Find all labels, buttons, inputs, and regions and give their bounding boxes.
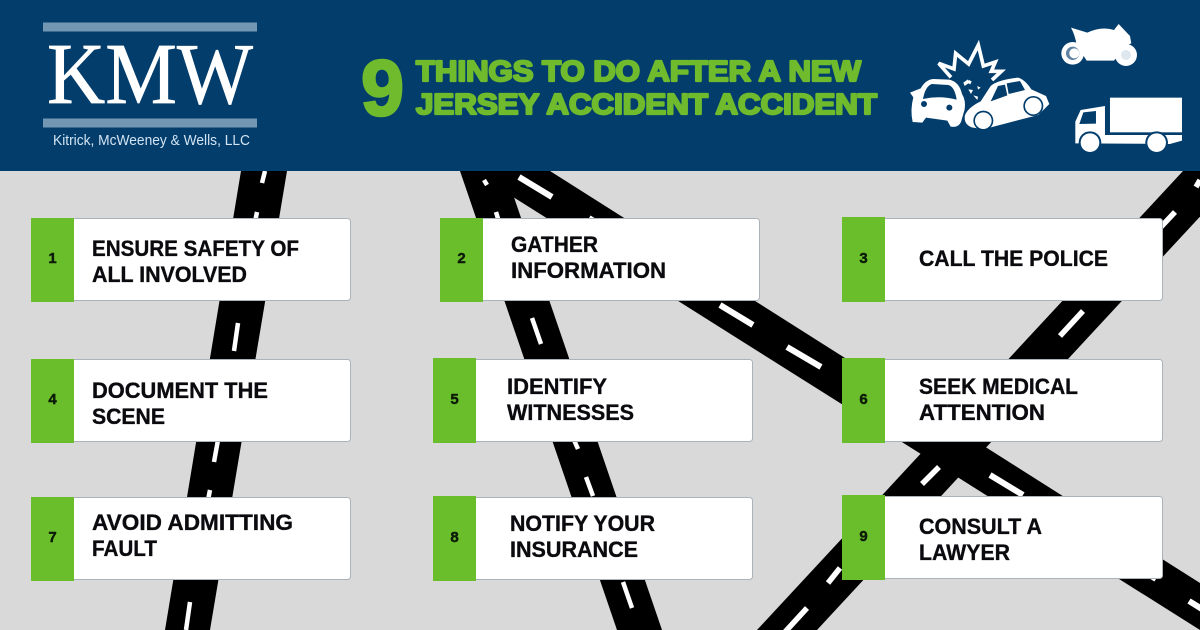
text 7: AVOID ADMITTING [92,510,293,535]
card 7 [31,497,350,581]
text 2: INFORMATION [511,258,666,283]
card 1 [31,218,350,302]
text 1: ENSURE SAFETY OF [92,236,299,261]
road: left [165,171,287,630]
text 8 [510,511,655,562]
number 2: 2 [457,250,466,267]
text 7 [92,510,293,561]
text 4: DOCUMENT THE [92,378,268,403]
card 3 [842,217,1162,302]
text 5: WITNESSES [507,400,634,425]
text 7: FAULT [92,536,157,561]
text 6: ATTENTION [919,400,1045,425]
text 2 [511,232,666,283]
text 2: GATHER [511,232,598,257]
number 5: 5 [450,391,459,408]
card 6 [842,358,1162,443]
title text: JERSEY ACCIDENT ACCIDENT [416,89,878,121]
text 3: CALL THE POLICE [919,246,1108,271]
title numeral: 9 [361,43,404,132]
icon: truck [1075,98,1182,154]
number 6: 6 [859,391,868,408]
text 6: SEEK MEDICAL [919,374,1078,399]
text 4: SCENE [92,404,165,429]
roads [165,171,1200,630]
text 9: CONSULT A [919,514,1042,539]
card 2 [440,218,760,302]
card 9 [842,495,1162,580]
card 8 [433,496,752,581]
road: right diagonal [757,171,1200,630]
card 5 [433,358,752,443]
text 8: NOTIFY YOUR [510,511,655,536]
text 9 [919,514,1042,565]
logo letters: KMW [47,25,253,122]
road: centre [460,171,1200,630]
text 1 [92,236,299,287]
text 4 [92,378,268,429]
title [361,43,878,132]
number 9: 9 [859,528,868,545]
text 1: ALL INVOLVED [92,262,247,287]
text 5: IDENTIFY [507,374,607,399]
firm name: Kitrick, McWeeney & Wells, LLC [53,133,250,149]
icon: car crash [910,45,1049,131]
header band [0,0,1200,171]
title text [416,56,878,121]
text 5 [507,374,634,425]
number 3: 3 [859,250,868,267]
number 1: 1 [48,250,57,267]
card 4 [31,359,350,443]
number 4: 4 [48,391,57,408]
logo [43,22,257,149]
text 8: INSURANCE [510,537,638,562]
number 7: 7 [48,529,57,546]
text 6 [919,374,1078,425]
number 8: 8 [450,529,459,546]
title text: THINGS TO DO AFTER A NEW [416,56,861,88]
icon: motorcycle [1061,24,1137,66]
text 9: LAWYER [919,540,1010,565]
